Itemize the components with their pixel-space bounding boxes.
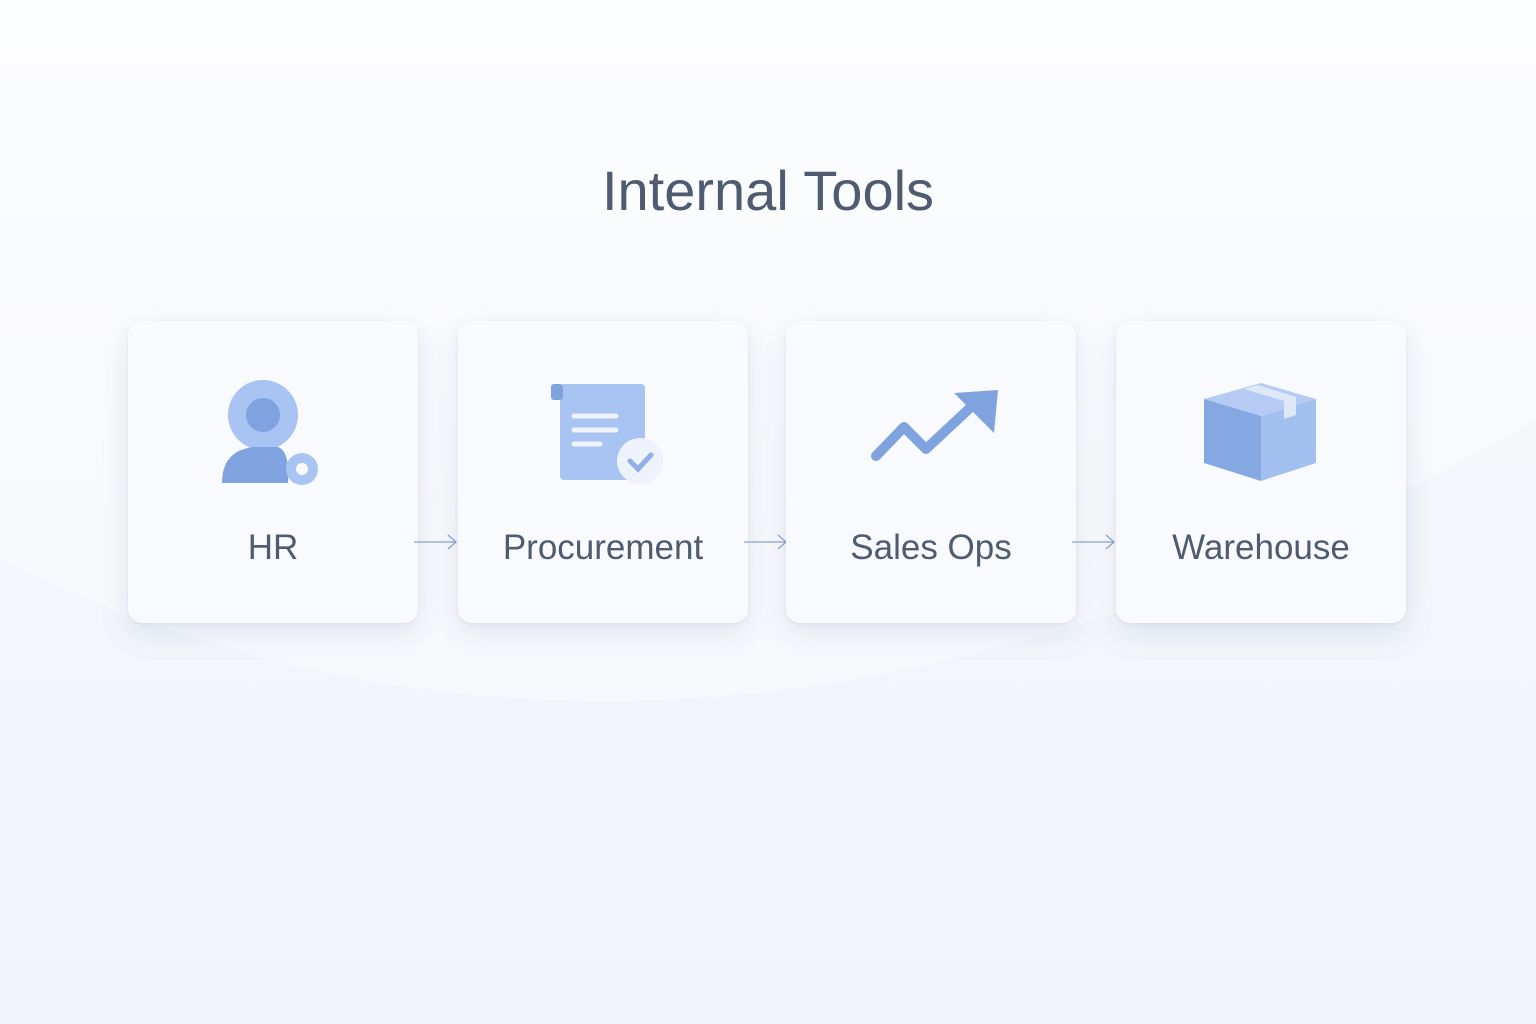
card: Procurement (458, 321, 748, 623)
icon: user gear (222, 380, 318, 485)
label: Sales Ops (850, 528, 1012, 567)
label: HR (248, 528, 298, 567)
label: Procurement (503, 528, 703, 567)
card: Sales Ops (786, 321, 1076, 623)
arrow (744, 534, 786, 550)
card: Warehouse (1116, 321, 1406, 623)
arrow (414, 534, 457, 550)
card: HR (128, 321, 418, 623)
label: Warehouse (1172, 528, 1350, 567)
icon: box (1204, 383, 1316, 481)
arrow (1072, 534, 1115, 550)
title: Internal Tools (602, 159, 934, 222)
icon: trend arrow (871, 390, 998, 461)
icon: document check (551, 384, 663, 484)
